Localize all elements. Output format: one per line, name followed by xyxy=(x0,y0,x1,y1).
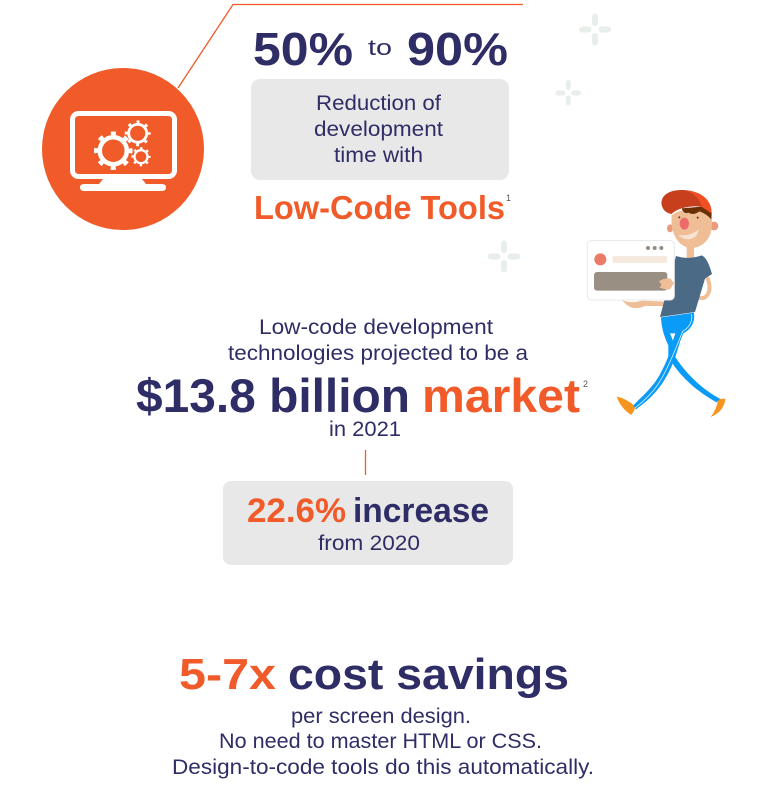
heading: 5-7x cost savings xyxy=(179,650,569,699)
heading: Low-Code Tools: 1 xyxy=(506,193,511,203)
panel: reduction of development time: Reduction of xyxy=(316,92,441,115)
heading: 50% to 90%: 50% xyxy=(253,23,353,75)
character legs xyxy=(617,313,725,417)
text block: cost savings details: Design-to-code tools do this automatically. xyxy=(172,756,594,779)
heading: 5-7x cost savings: 5-7x xyxy=(179,650,277,699)
heading: $13.8 billion market xyxy=(136,369,588,422)
heading: 50% to 90%: 90% xyxy=(407,23,508,75)
panel: 22.6% increase: increase xyxy=(353,492,489,530)
panel: 22.6% increase xyxy=(223,481,513,565)
text block: cost savings details: per screen design. xyxy=(291,705,471,728)
text block: low-code development: Low-code development xyxy=(259,316,493,339)
heading: $13.8 billion market: market xyxy=(422,369,580,422)
panel: reduction of development time: development xyxy=(314,118,443,141)
panel: reduction of development time xyxy=(251,79,509,180)
icon: monitor with gears xyxy=(42,68,204,230)
heading: Low-Code Tools: Low-Code Tools xyxy=(254,189,505,226)
panel: reduction of development time: time with xyxy=(334,144,423,167)
text block: low-code development xyxy=(228,316,528,365)
illustration: man carrying a web card xyxy=(587,190,725,417)
heading: $13.8 billion market: 2 xyxy=(583,379,588,389)
heading: $13.8 billion market: $13.8 billion xyxy=(136,369,410,422)
heading: 50% to 90%: to xyxy=(368,35,392,60)
panel: 22.6% increase: 22.6% xyxy=(247,492,346,530)
text block: low-code development: technologies projected to be a xyxy=(228,342,528,365)
text: in 2021: in 2021 xyxy=(329,418,401,441)
heading: 5-7x cost savings: cost savings xyxy=(288,650,569,699)
text block: cost savings details xyxy=(172,705,594,779)
sparkle decoration xyxy=(491,16,608,270)
heading: 50% to 90% xyxy=(253,23,508,75)
connector line xyxy=(364,450,366,475)
character upper body and head xyxy=(587,190,718,317)
text block: cost savings details: No need to master HTML or CSS. xyxy=(219,730,542,753)
panel: 22.6% increase: from 2020 xyxy=(318,532,420,555)
connector line xyxy=(178,4,523,88)
